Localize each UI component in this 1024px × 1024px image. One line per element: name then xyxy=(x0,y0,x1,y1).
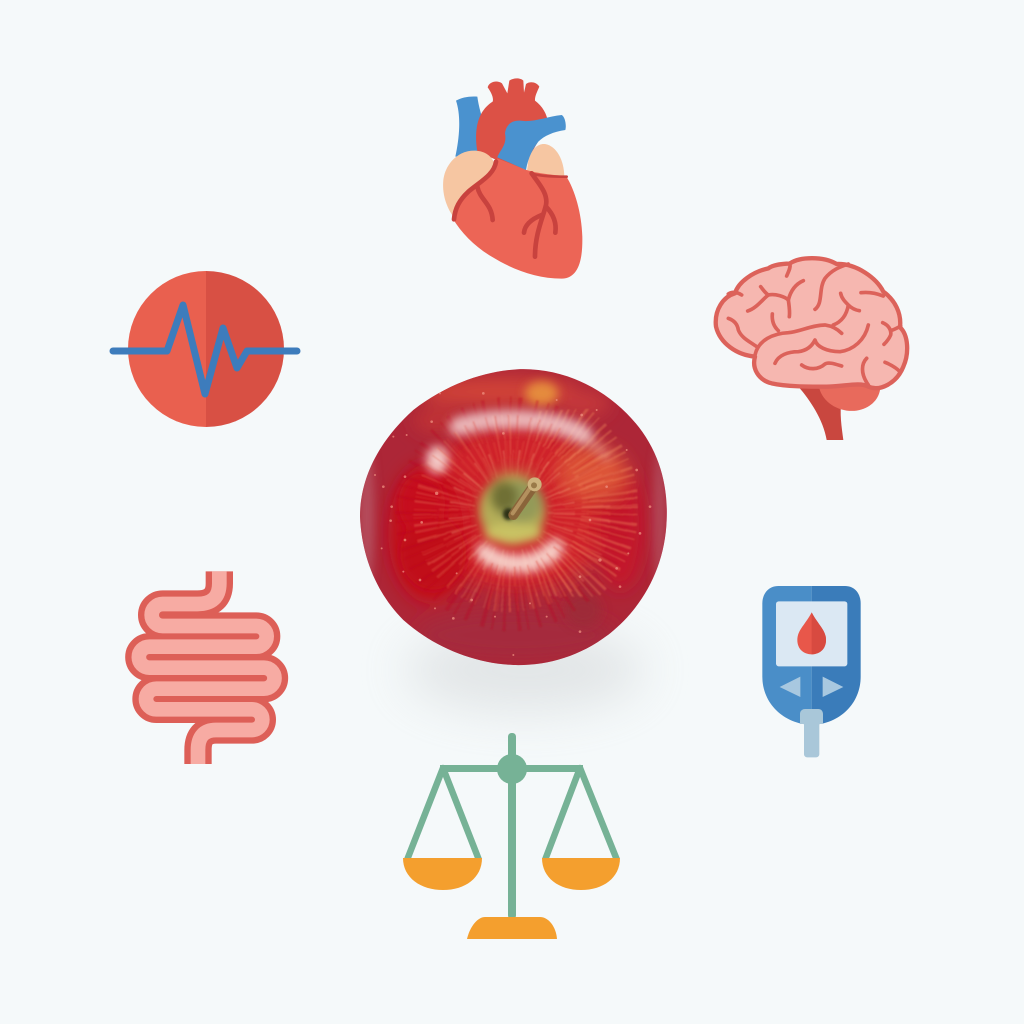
coronary vessels xyxy=(454,162,567,257)
right pan xyxy=(542,858,620,890)
brain folds xyxy=(728,264,901,385)
icon: pulse circle xyxy=(113,271,297,427)
heart ventricles xyxy=(453,158,582,279)
scale base xyxy=(467,917,557,939)
pulmonary artery xyxy=(497,115,566,170)
scale post xyxy=(508,733,516,919)
cerebrum xyxy=(716,258,907,388)
right arrow button xyxy=(823,677,843,697)
left pan xyxy=(403,858,482,890)
meter screen xyxy=(776,601,847,666)
test strip xyxy=(800,709,823,757)
circle left half xyxy=(128,271,206,427)
icon: glucose meter xyxy=(762,586,861,757)
stem cavity xyxy=(479,465,546,545)
radial streaks xyxy=(415,413,610,610)
left hanger xyxy=(407,768,479,860)
icon: brain xyxy=(716,258,907,440)
icon: heart xyxy=(443,78,582,279)
left arrow button xyxy=(780,677,800,697)
superior vena cava xyxy=(455,96,485,157)
heartbeat line xyxy=(113,305,297,394)
scale beam xyxy=(440,765,583,772)
brain stem xyxy=(798,383,847,440)
meter body left xyxy=(762,586,812,725)
meter body right xyxy=(812,586,861,725)
right atrium xyxy=(443,151,494,217)
aorta xyxy=(476,78,548,173)
photo of red apple xyxy=(359,369,667,665)
intestine outer tube xyxy=(139,571,274,764)
intestine inner tube xyxy=(139,571,274,764)
icon: intestines xyxy=(139,571,274,764)
left atrium xyxy=(527,144,564,180)
cerebellum xyxy=(819,380,880,411)
apple shadow xyxy=(405,628,645,712)
right hanger xyxy=(545,768,617,860)
scale pivot xyxy=(497,754,527,784)
apple stem xyxy=(513,477,542,515)
apple speckles xyxy=(374,392,651,656)
fine streaks over highlights xyxy=(425,427,598,600)
icon: balance scale xyxy=(403,733,620,939)
apple skin highlights xyxy=(426,419,607,564)
circle right half xyxy=(206,271,284,427)
blood drop xyxy=(797,612,826,654)
